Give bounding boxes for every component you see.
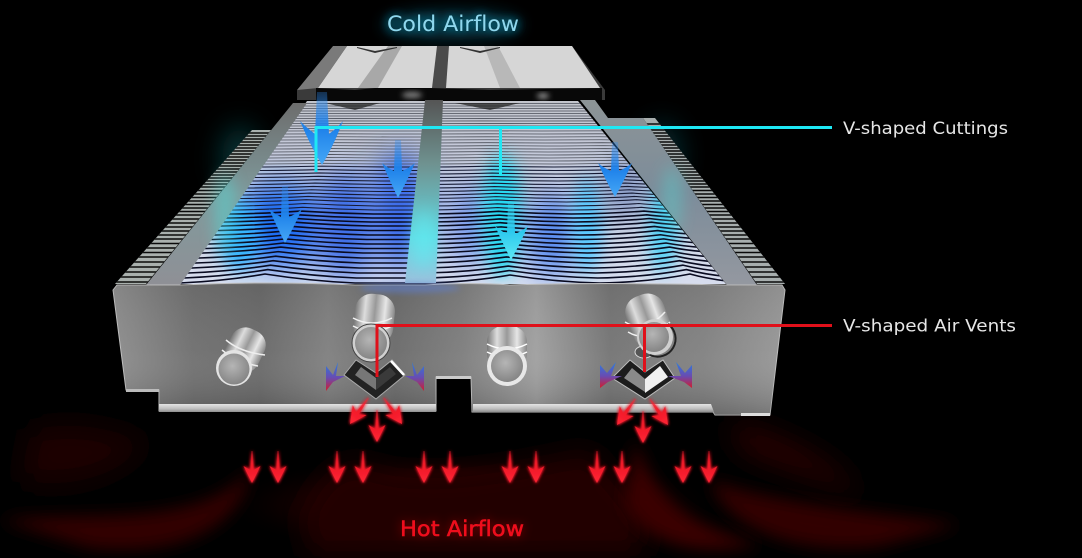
arrow 4 xyxy=(495,202,528,260)
blue flow arrows xyxy=(269,92,632,260)
heat pipe 1 xyxy=(216,322,271,386)
arrow 5 xyxy=(598,142,632,197)
heat pipe 3 xyxy=(487,326,527,386)
row of hot-air arrows xyxy=(244,451,718,483)
callout lines: V-shaped Air Vents xyxy=(377,326,832,377)
red exhaust arrows, right vent xyxy=(610,394,675,443)
fin lines xyxy=(180,103,724,284)
cyan glow behind heatsink xyxy=(222,10,680,190)
arrow 2 xyxy=(382,140,415,198)
left rail xyxy=(146,103,307,285)
callout lines: V-shaped Cuttings xyxy=(316,128,832,176)
heat pipe 4 xyxy=(620,289,676,358)
V-shaped air vent, left xyxy=(344,360,405,399)
title: Hot Airflow: Hot Airflow xyxy=(400,517,524,541)
title: Cold Airflow: Cold Airflow xyxy=(387,12,519,36)
arrow 1 xyxy=(300,92,343,165)
bottom strips xyxy=(159,404,436,412)
heat pipe 2 xyxy=(352,292,397,362)
outer side fins, left xyxy=(115,130,271,284)
arrow 3 xyxy=(269,186,302,243)
red exhaust arrows, left vent xyxy=(343,393,409,442)
right rail xyxy=(580,100,757,285)
metal front plate xyxy=(113,283,785,416)
main fin stack xyxy=(180,101,726,284)
label: V-shaped Air Vents: V-shaped Air Vents xyxy=(843,316,1016,336)
label: V-shaped Cuttings: V-shaped Cuttings xyxy=(843,119,1008,139)
rear heatsink section xyxy=(297,46,605,100)
side glows over rails xyxy=(215,166,681,270)
small blue-red vent arrows xyxy=(326,362,692,391)
V-shaped air vent, right xyxy=(612,360,675,399)
blue reflection xyxy=(360,283,460,293)
blue airflow plumes xyxy=(220,152,678,277)
outer side fins, right xyxy=(643,118,785,284)
red hot-air smoke xyxy=(0,420,960,558)
centre rail xyxy=(405,100,443,283)
